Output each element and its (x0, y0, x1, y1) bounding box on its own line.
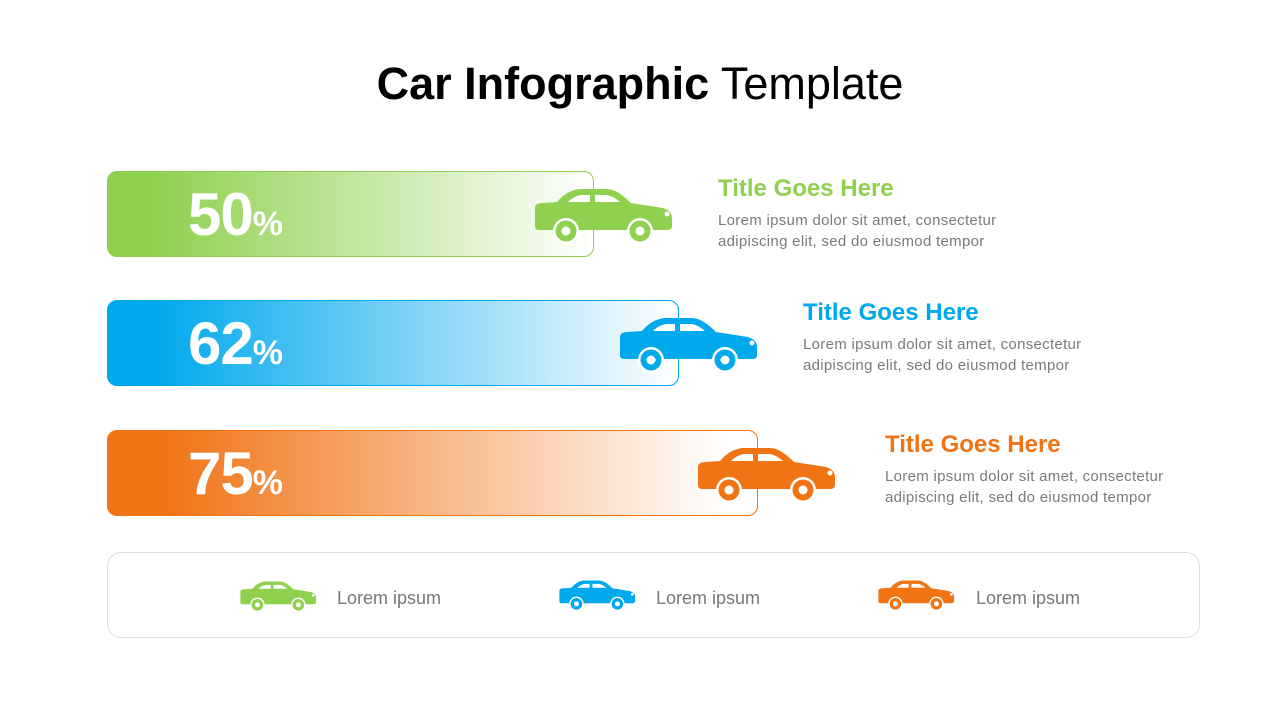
text orange: Lorem ipsum dolor sit amet, consectetur (885, 468, 1163, 485)
title blue: Title Goes Here (803, 299, 979, 326)
bar: 62% blue (107, 300, 679, 386)
text blue (803, 336, 1081, 374)
percent 62: 62% (188, 310, 283, 377)
icon: orange car (698, 448, 835, 500)
bar: 50% green (107, 171, 594, 257)
icon: blue car (620, 318, 757, 373)
text blue: adipiscing elit, sed do eiusmod tempor (803, 357, 1070, 374)
title green: Title Goes Here (718, 175, 894, 202)
text green: adipiscing elit, sed do eiusmod tempor (718, 233, 985, 250)
text green: Lorem ipsum dolor sit amet, consectetur (718, 212, 996, 229)
legend label 1: Lorem ipsum (337, 588, 441, 608)
percent 75: 75% (188, 440, 283, 507)
text blue: Lorem ipsum dolor sit amet, consectetur (803, 336, 1081, 353)
title: Car Infographic Template (377, 58, 903, 109)
legend label 2: Lorem ipsum (656, 588, 760, 608)
title orange: Title Goes Here (885, 431, 1061, 458)
legend panel (107, 552, 1200, 638)
percent 50: 50% (188, 181, 283, 248)
bar: 75% orange (107, 430, 758, 516)
text orange (885, 468, 1163, 506)
text orange: adipiscing elit, sed do eiusmod tempor (885, 489, 1152, 506)
text green (718, 212, 996, 250)
legend label 3: Lorem ipsum (976, 588, 1080, 608)
legend blue car (559, 580, 636, 610)
icon: green car (535, 189, 672, 244)
legend green (240, 582, 316, 611)
legend orange car (878, 580, 954, 610)
